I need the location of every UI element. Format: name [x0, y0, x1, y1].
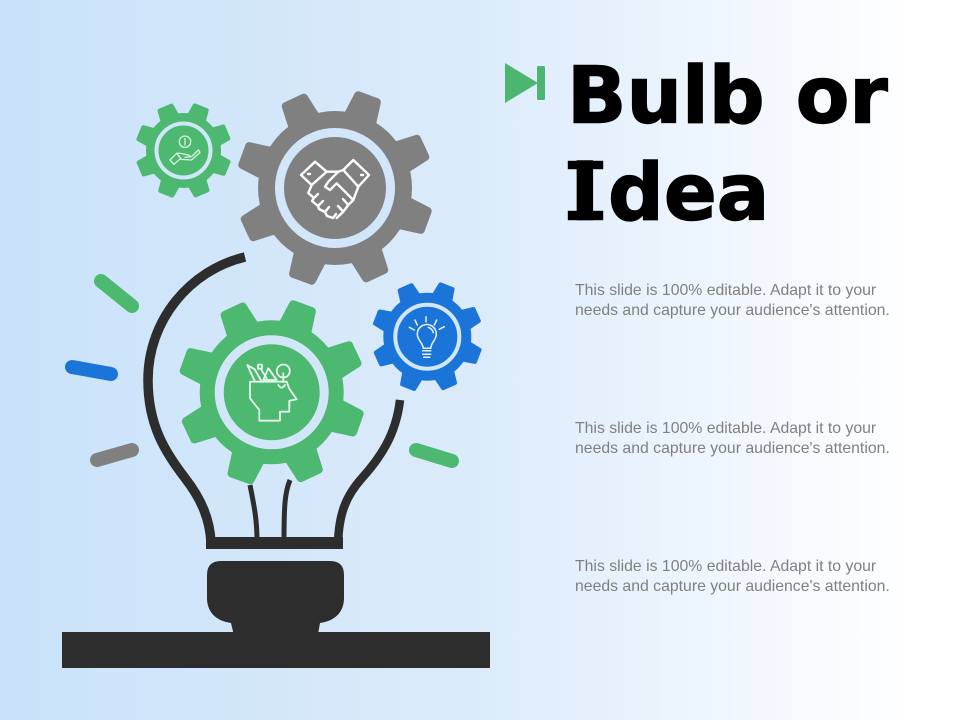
bulb socket — [207, 561, 344, 640]
text block 1: This slide is 100% editable. Adapt it to your — [575, 282, 876, 299]
text block 1: needs and capture your audience's attention. — [575, 302, 890, 319]
ray: green right — [416, 450, 452, 461]
text block 2 — [575, 420, 890, 457]
gear: blue lightbulb — [374, 284, 480, 390]
text block 2: This slide is 100% editable. Adapt it to your — [575, 420, 876, 437]
title: I — [570, 146, 600, 238]
title: Bulb or — [567, 52, 888, 142]
gear: small green hand with coin — [138, 105, 229, 196]
icon: next arrow marker — [505, 63, 545, 103]
gear: large green head — [183, 303, 361, 481]
ray: blue left — [72, 367, 111, 374]
ray: gray lower left — [97, 450, 132, 460]
icon: handshake — [301, 160, 369, 218]
title: dea — [608, 148, 769, 238]
ray: green upper left — [101, 281, 132, 306]
icon: hand holding coin — [170, 136, 200, 164]
title — [567, 52, 888, 238]
text block 1 — [575, 282, 890, 319]
bulb outline — [148, 257, 400, 543]
gear: gray handshake — [241, 94, 429, 282]
icon: lightbulb — [409, 317, 444, 357]
text block 3: needs and capture your audience's attention. — [575, 578, 890, 595]
icon: head with tools — [247, 364, 297, 421]
text block 2: needs and capture your audience's attention. — [575, 440, 890, 457]
bulb collar — [206, 537, 343, 549]
text block 3 — [575, 558, 890, 595]
text block 3: This slide is 100% editable. Adapt it to your — [575, 558, 876, 575]
base bar — [62, 632, 490, 668]
